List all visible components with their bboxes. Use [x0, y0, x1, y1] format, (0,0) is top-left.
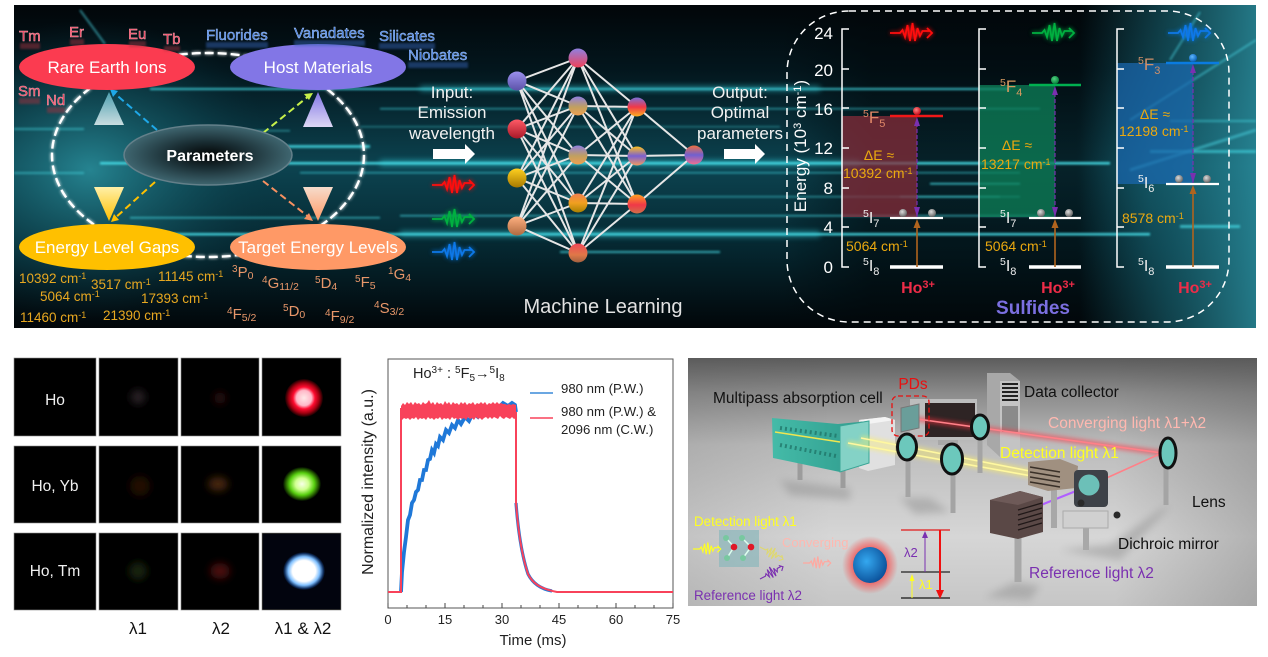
- target energy level term labels: S: [380, 300, 390, 317]
- large dashed ring connecting the four categories: [52, 53, 364, 257]
- diagram: 5F3 blue emission: 8578 cm: [1122, 210, 1176, 226]
- icon: photodetector with dashed PDs outline: PDs: [898, 376, 928, 393]
- energy gap value labels: -1: [92, 289, 100, 299]
- setup labels: Multipass absorption cell: [713, 390, 883, 407]
- target energy level term labels: 3/2: [390, 306, 404, 318]
- arrow: network to output: [724, 144, 765, 164]
- rare earth element labels: Sm: [18, 83, 40, 100]
- x axis labels: 30: [495, 612, 509, 627]
- diagram: 5F4 green emission: I: [1006, 258, 1010, 275]
- x axis title: Time (ms): [500, 632, 566, 649]
- diagram: 5F4 green emission: [979, 23, 1081, 297]
- energy gap value labels: -1: [143, 277, 151, 287]
- diagram: 5F5 red emission: 8: [873, 266, 879, 278]
- diagram: 5F4 green emission: 3+: [1062, 279, 1075, 291]
- icon: monitor: [910, 399, 977, 445]
- parameters central node: Parameters: [166, 148, 254, 165]
- diagram: 5F4 green emission: F: [1006, 77, 1016, 96]
- chart title: 5: [455, 365, 461, 376]
- beam labels: Detection light λ1: [1000, 445, 1119, 462]
- target energy level term labels: P: [238, 264, 248, 281]
- diagram: 5F3 blue emission: -1: [1176, 211, 1184, 221]
- target energy level term labels: 5: [283, 303, 289, 314]
- diagram: 5F4 green emission: 13217 cm: [981, 156, 1042, 172]
- target energy level term labels: 0: [248, 270, 254, 282]
- red curve: 980 nm and 2096 nm: [388, 400, 673, 592]
- diagram: 5F5 red emission: 5064 cm: [846, 238, 900, 254]
- target energy level term labels: 3: [232, 264, 238, 275]
- host material labels: Vanadates: [294, 25, 365, 42]
- diagram: 5F3 blue emission: F: [1144, 55, 1154, 74]
- diagram: 5F3 blue emission: 5: [1138, 173, 1144, 185]
- diagram: 5F5 red emission: 3+: [922, 279, 935, 291]
- diagram: 5F4 green emission: 5: [1000, 256, 1006, 268]
- diagram: 5F4 green emission: 4: [1016, 87, 1022, 99]
- target energy level term labels: D: [321, 275, 332, 292]
- blue curve: 980 nm pulsed: [401, 403, 516, 592]
- chart title: I: [495, 366, 499, 382]
- panel: sulfides energy level diagrams: [787, 11, 1229, 322]
- light beams: [848, 418, 1162, 505]
- setup labels: Data collector: [1024, 384, 1119, 401]
- target energy level term labels: 4: [374, 300, 380, 311]
- target energy level term labels: G: [394, 266, 405, 283]
- input label: wavelength: [408, 124, 495, 143]
- target energy level term labels: F: [361, 274, 370, 291]
- host materials node: [230, 44, 406, 90]
- chart title: F: [461, 366, 470, 382]
- dashed arrows from Parameters: [110, 89, 313, 222]
- diagram: 5F5 red emission: ΔE ≈: [864, 147, 894, 163]
- target energy level term labels: [227, 264, 411, 326]
- diagram: 5F5 red emission: F: [869, 108, 879, 127]
- diagram: 5F5 red emission: 5: [863, 256, 869, 268]
- chart title: 5: [490, 365, 496, 376]
- output label: Output:: [712, 83, 768, 102]
- inset: molecule and converging schematic: [693, 514, 898, 603]
- target energy level term labels: 5: [370, 280, 376, 292]
- input label: Input:: [431, 83, 473, 102]
- energy axis tick labels: 4: [824, 218, 833, 237]
- inset: two-step energy level diagram: [901, 530, 950, 599]
- target energy level term labels: 5: [355, 274, 361, 285]
- diagram: 5F3 blue emission: I: [1144, 175, 1148, 192]
- icon: detection laser heat sink: [1028, 459, 1078, 528]
- legend: [530, 381, 656, 437]
- diagram: 5F3 blue emission: 5: [1138, 256, 1144, 268]
- target energy level term labels: 4: [227, 306, 233, 317]
- chart title: Ho: [413, 366, 432, 382]
- parameters central node: [124, 125, 292, 185]
- energy gap value labels: -1: [78, 271, 86, 281]
- diagram: 5F5 red emission: 5: [879, 118, 885, 130]
- energy gap value labels: -1: [162, 308, 170, 318]
- diagram: 5F3 blue emission: 3+: [1199, 279, 1212, 291]
- column labels: λ2: [212, 619, 230, 638]
- diagram: 5F5 red emission: 5: [863, 208, 869, 220]
- input label: [408, 83, 495, 143]
- legend: 980 nm (P.W.): [561, 381, 644, 396]
- diagram: 5F5 red emission: 10392 cm: [843, 165, 904, 181]
- setup labels: Dichroic mirror: [1118, 536, 1219, 553]
- energy gap value labels: -1: [200, 291, 208, 301]
- diagram: 5F4 green emission: Ho: [1041, 280, 1062, 297]
- diagram: 5F5 red emission: -1: [900, 239, 908, 249]
- inset: molecule and converging schematic: Reference light λ2: [694, 588, 802, 603]
- diagram: 5F5 red emission: 5: [863, 108, 869, 120]
- inset: molecule and converging schematic: Converging: [782, 535, 848, 550]
- floor shadows: [780, 480, 1170, 600]
- rare earth ions node: [19, 44, 195, 90]
- energy axis tick labels: 8: [824, 179, 833, 198]
- diagram: 5F4 green emission: 5: [1000, 208, 1006, 220]
- setup labels: [713, 384, 1226, 553]
- diagram: 5F5 red emission: Ho: [901, 280, 922, 297]
- energy gap value labels: 11145 cm: [158, 269, 215, 284]
- diagram: 5F4 green emission: 7: [1010, 218, 1016, 230]
- energy axis tick labels: 12: [814, 139, 833, 158]
- inset: two-step energy level diagram: λ2: [904, 545, 918, 560]
- diagram: 5F5 red emission: I: [869, 210, 873, 227]
- target energy level term labels: 4: [262, 275, 268, 286]
- target energy level term labels: 11/2: [279, 281, 299, 293]
- target energy level term labels: 4: [331, 281, 337, 293]
- rare earth element labels: Tb: [163, 31, 181, 48]
- triangle markers pointing to parameter groups: [94, 92, 333, 221]
- diagram: 5F3 blue emission: ΔE ≈: [1140, 106, 1170, 122]
- energy gap value labels: 17393 cm: [141, 291, 200, 306]
- diagram: 5F3 blue emission: 6: [1148, 183, 1154, 195]
- host materials node: Host Materials: [264, 58, 372, 77]
- rare earth element labels: [18, 24, 181, 113]
- energy gap value labels: [19, 269, 223, 325]
- output label: Optimal: [711, 103, 769, 122]
- column labels: [129, 619, 331, 638]
- energy axis tick labels: [814, 24, 833, 277]
- diagram: 5F4 green emission: 5: [1000, 77, 1006, 89]
- arrow: input to network: [433, 144, 475, 164]
- sulfides caption: Sulfides: [996, 298, 1070, 319]
- diagram: 5F4 green emission: 8: [1010, 266, 1016, 278]
- energy gap value labels: 11460 cm: [20, 310, 78, 325]
- target energy levels node: Target Energy Levels: [238, 238, 398, 257]
- target energy levels node: [230, 224, 406, 270]
- row labels: Ho, Yb: [31, 478, 79, 495]
- column labels: λ1 & λ2: [275, 619, 331, 638]
- diagram: 5F3 blue emission: -1: [1180, 124, 1188, 134]
- output label: parameters: [697, 124, 783, 143]
- diagram: 5F5 red emission: [842, 23, 943, 297]
- icon: reference laser heat sink: [990, 491, 1043, 582]
- row labels: Ho: [45, 392, 65, 409]
- panel: optical experiment setup: [688, 358, 1257, 606]
- rare earth element labels: Nd: [46, 92, 65, 109]
- diagram: 5F4 green emission: 5064 cm: [985, 238, 1039, 254]
- target energy level term labels: 4: [405, 272, 411, 284]
- rare earth element labels: Eu: [128, 26, 146, 43]
- energy axis title: -1: [792, 86, 804, 95]
- diagram: 5F4 green emission: -1: [1039, 239, 1047, 249]
- rare earth element labels: Tm: [19, 28, 41, 45]
- legend: 980 nm (P.W.) &: [561, 404, 656, 419]
- diagram: 5F3 blue emission: 5: [1138, 55, 1144, 67]
- diagram: 5F5 red emission: I: [869, 258, 873, 275]
- target energy level term labels: 0: [299, 309, 305, 321]
- icon: photodetector with dashed PDs outline: [892, 376, 929, 436]
- target energy level term labels: 5: [315, 275, 321, 286]
- energy level gaps node: [19, 224, 195, 270]
- chart title: →: [475, 366, 490, 382]
- host material labels: Niobates: [408, 47, 467, 64]
- energy gap value labels: 3517 cm: [91, 277, 143, 292]
- rare earth element labels: Er: [69, 24, 84, 41]
- x axis labels: 45: [552, 612, 566, 627]
- energy axis title: cm: [791, 95, 810, 123]
- energy gap value labels: 21390 cm: [103, 308, 162, 323]
- icon: data collector tower: [987, 373, 1020, 457]
- diagram: 5F3 blue emission: I: [1144, 258, 1148, 275]
- machine learning caption: Machine Learning: [524, 296, 682, 318]
- icon: dichroic mirror mount: [1063, 470, 1120, 550]
- icon: red, green, blue emission waves: [432, 175, 474, 260]
- host material labels: Silicates: [379, 28, 435, 45]
- chart title: 3+: [432, 365, 443, 376]
- diagram: 5F4 green emission: I: [1006, 210, 1010, 227]
- energy gap value labels: -1: [215, 269, 223, 279]
- diagram: 5F5 red emission: 7: [873, 218, 879, 230]
- input label: Emission: [418, 103, 486, 122]
- energy gap value labels: -1: [78, 310, 86, 320]
- diagram: 5F3 blue emission: 12198 cm: [1119, 123, 1180, 139]
- diagram: 5F5 red emission: -1: [904, 166, 912, 176]
- neural network diagram: [508, 48, 704, 262]
- setup labels: Lens: [1192, 494, 1226, 511]
- dim emission spots: [129, 390, 230, 580]
- inset: molecule and converging schematic: Detection light λ1: [694, 514, 797, 529]
- target energy level term labels: 5/2: [242, 312, 256, 324]
- inset: two-step energy level diagram: λ1: [919, 577, 933, 592]
- energy axis title: 3: [792, 123, 804, 129]
- energy axis title: ): [791, 80, 810, 86]
- diagram: 5F3 blue emission: 8: [1148, 266, 1154, 278]
- row labels: Ho, Tm: [30, 563, 80, 580]
- target energy level term labels: F: [233, 306, 242, 323]
- legend: 2096 nm (C.W.): [561, 422, 653, 437]
- energy axis tick labels: 24: [814, 24, 833, 43]
- y axis title: Normalized intensity (a.u.): [360, 389, 377, 575]
- diagram: 5F3 blue emission: Ho: [1178, 280, 1199, 297]
- icon: multipass absorption cell: [772, 418, 869, 488]
- beam labels: Reference light λ2: [1029, 565, 1154, 582]
- chart title: 8: [499, 373, 505, 384]
- host material labels: [206, 25, 468, 68]
- chart: normalized intensity decay: [360, 359, 680, 649]
- output label: [697, 83, 783, 143]
- x axis labels: [384, 612, 680, 627]
- chart title: 5: [469, 373, 475, 384]
- diagram: 5F3 blue emission: 3: [1154, 65, 1160, 77]
- energy level gaps node: Energy Level Gaps: [35, 238, 179, 257]
- beam labels: Converging light λ1+λ2: [1048, 415, 1206, 432]
- energy axis tick labels: 20: [814, 61, 833, 80]
- target energy level term labels: 4: [325, 308, 331, 319]
- diagram: 5F4 green emission: ΔE ≈: [1002, 137, 1032, 153]
- x axis labels: 75: [666, 612, 680, 627]
- target energy level term labels: G: [268, 275, 279, 292]
- energy gap value labels: 10392 cm: [19, 271, 78, 286]
- icon: lenses on posts: [898, 415, 1176, 513]
- x axis labels: 0: [384, 612, 392, 627]
- top banner panel: machine learning workflow: [0, 5, 1256, 328]
- host material labels: Fluorides: [206, 27, 268, 44]
- target energy level term labels: F: [331, 308, 340, 325]
- row labels: [30, 392, 80, 580]
- energy gap value labels: 5064 cm: [40, 289, 92, 304]
- energy axis tick labels: 16: [814, 100, 833, 119]
- panel: luminescence photo grid: [14, 358, 341, 638]
- diagram: 5F4 green emission: -1: [1042, 157, 1050, 167]
- target energy level term labels: 9/2: [340, 314, 354, 326]
- target energy level term labels: 1: [388, 266, 394, 277]
- rare earth ions node: Rare Earth Ions: [47, 58, 167, 77]
- chart title: :: [443, 366, 455, 382]
- bright emission spots: [263, 379, 340, 609]
- column labels: λ1: [129, 619, 147, 638]
- icon: white controller box: [859, 417, 895, 471]
- diagram: 5F3 blue emission: [1117, 23, 1219, 297]
- x axis ticks: [388, 603, 673, 608]
- x axis labels: 60: [609, 612, 623, 627]
- energy axis title: Energy (10: [791, 129, 810, 212]
- x axis labels: 15: [438, 612, 452, 627]
- beam labels: [1000, 415, 1206, 582]
- target energy level term labels: D: [289, 303, 300, 320]
- energy axis tick labels: 0: [824, 258, 833, 277]
